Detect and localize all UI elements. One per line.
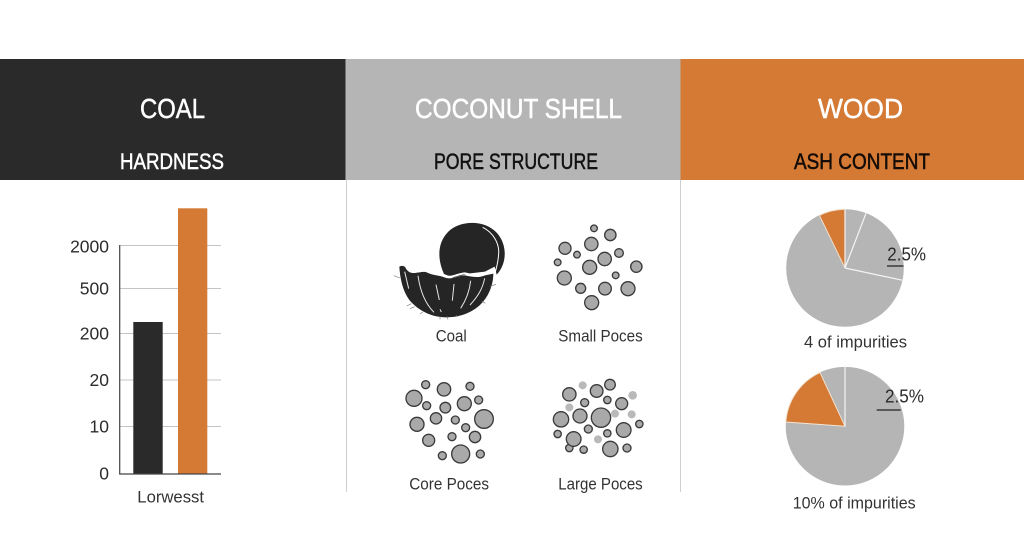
axis labels: 2000	[70, 237, 109, 257]
axis labels: 20	[90, 370, 109, 390]
pie slice: orange	[819, 209, 845, 268]
axis labels: 200	[80, 323, 109, 343]
subheading: ash content: ASH CONTENT	[794, 149, 930, 174]
heading: coconut shell: COCONUT SHELL	[415, 93, 622, 124]
icon: large pores	[553, 379, 643, 457]
caption: 10% of impurities	[793, 493, 916, 512]
subheading: hardness: HARDNESS	[120, 149, 224, 174]
bar: coal	[133, 322, 163, 474]
icon: coconut	[394, 223, 505, 319]
value label: 2.5%	[887, 245, 926, 265]
axis labels: 500	[80, 278, 109, 298]
pie chart: bottom	[786, 367, 924, 512]
heading: coal: COAL	[140, 93, 205, 124]
label: small pores: Small Poces	[558, 327, 643, 346]
axis labels	[70, 237, 109, 483]
panel: coal header	[0, 59, 346, 180]
value label: 2.5%	[885, 386, 924, 406]
panel: coconut shell header	[346, 59, 680, 180]
bar: wood	[178, 208, 207, 474]
label: coal: Coal	[436, 327, 467, 346]
chart axes	[120, 245, 221, 474]
bar chart: hardness	[70, 208, 221, 507]
label: large pores: Large Poces	[558, 474, 643, 493]
axis labels: 10	[90, 417, 109, 437]
panel: wood header	[680, 59, 1024, 180]
axis labels: 0	[99, 463, 109, 483]
icon: core pores	[406, 381, 493, 463]
subheading: pore structure: PORE STRUCTURE	[434, 149, 598, 174]
pie chart: top	[786, 209, 926, 351]
caption: 4 of impurities	[804, 332, 907, 351]
x axis label: Lorwesst	[137, 488, 204, 507]
heading: wood: WOOD	[818, 93, 903, 124]
label: core pores: Core Poces	[409, 474, 489, 493]
pie slice: orange	[786, 372, 845, 426]
icon: small pores	[554, 225, 642, 310]
